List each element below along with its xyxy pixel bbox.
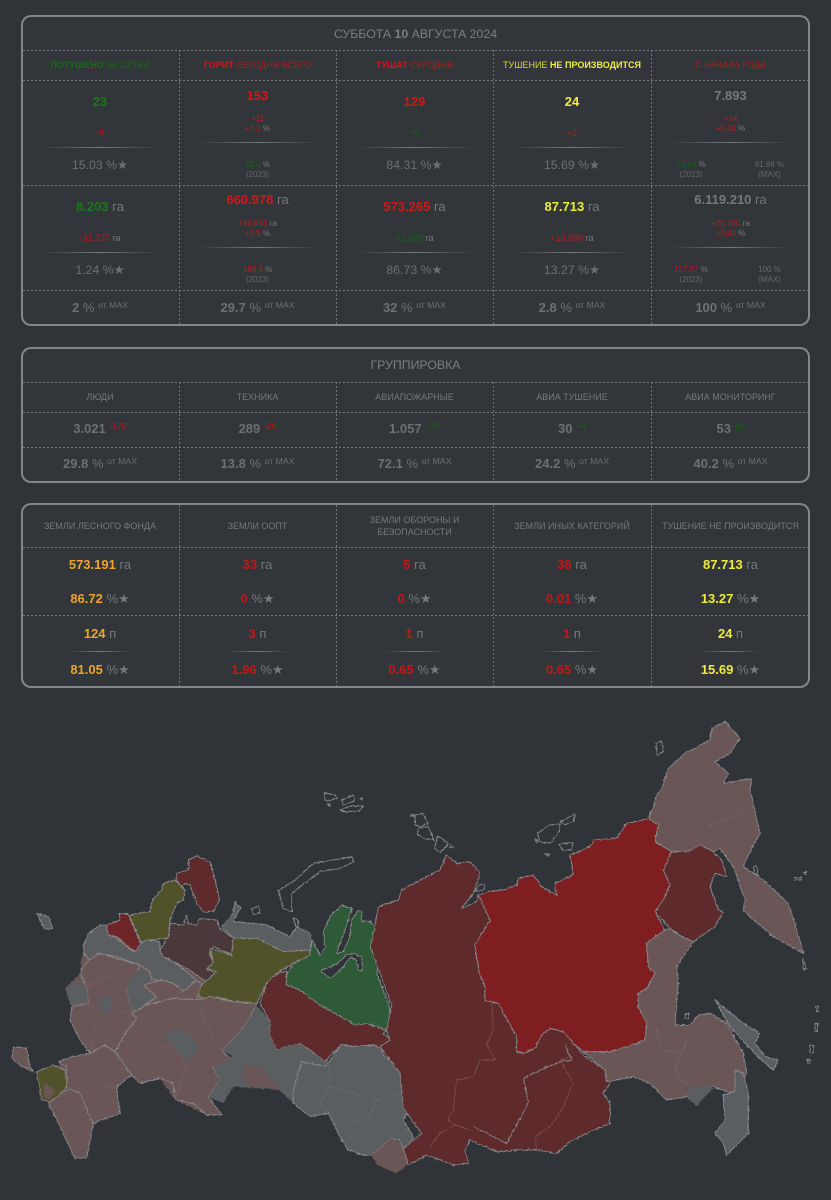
column: protected lands <box>228 521 288 677</box>
column: other lands: 36 га <box>557 557 587 572</box>
cell: year count: (2023) <box>679 170 703 179</box>
cell: extinguished area <box>48 199 153 277</box>
cell: not extinguished area <box>520 199 625 277</box>
island: Novaya Zemlya <box>278 857 354 912</box>
cell: burning area: 660.978 га <box>226 192 289 207</box>
column: forest lands: ЗЕМЛИ ЛЕСНОГО ФОНДА <box>44 521 156 531</box>
cell: not extinguished area: 87.713 га <box>544 199 600 214</box>
column: equipment <box>221 392 294 471</box>
column: not extinguished: 15.69 %★ <box>701 662 760 677</box>
cell: year count: +0,43 % <box>716 124 745 133</box>
region: Leningrad <box>107 913 141 952</box>
cell: being extinguished count <box>362 94 468 172</box>
region: Arkhangelsk <box>160 915 233 983</box>
column: forest lands: 81.05 %★ <box>70 662 130 677</box>
column: forest lands <box>44 521 156 677</box>
region: Kaliningrad <box>37 913 53 930</box>
region: Adygea <box>43 1083 55 1100</box>
column: people: 3.021 -170 <box>73 421 127 436</box>
column: not extinguished: 13.27 %★ <box>701 591 760 606</box>
cell: year area: +0,41 % <box>716 229 745 238</box>
region: Kostroma area <box>138 980 202 1010</box>
cell: being extinguished count: +9 <box>409 128 420 138</box>
column: protected lands: 3 п <box>249 626 266 641</box>
column: other lands: 0.01 %★ <box>546 591 598 606</box>
column: not extinguished <box>662 521 799 677</box>
column: defense lands: ЗЕМЛИ ОБОРОНЫ И <box>370 515 459 525</box>
column: aerial monitoring <box>685 392 776 471</box>
cell: being extinguished count: 84.31 %★ <box>386 158 443 172</box>
column: forest lands: 86.72 %★ <box>70 591 130 606</box>
column: protected lands: 1.96 %★ <box>231 662 284 677</box>
column: aerial firefighting: 30 +4 <box>558 421 586 436</box>
islands: Kuril and Commander <box>474 866 818 1063</box>
column: forest lands: 124 п <box>84 626 116 641</box>
cell: burning count: +11 <box>251 114 264 123</box>
region: Sverdlovsk and Tyumen <box>260 972 390 1062</box>
region: gray Siberia <box>293 1044 413 1155</box>
cell: extinguished count: 15.03 %★ <box>72 158 128 172</box>
cell: year area: +25.100 га <box>711 219 750 228</box>
cell: not extinguished count: 24 <box>565 94 579 109</box>
region: Yamal and Khanty-Mansi <box>287 905 391 1030</box>
region: gray Bashkiria <box>222 1005 277 1067</box>
column: other lands: 1 п <box>563 626 581 641</box>
islands: Franz Josef Land <box>323 793 363 812</box>
cell: year count: (MAX) <box>758 170 781 179</box>
inner borders, west <box>87 970 403 1123</box>
column: other lands: 0.65 %★ <box>546 662 598 677</box>
heading: forces: ГРУППИРОВКА <box>370 358 460 372</box>
cell: not extinguished count <box>519 94 625 172</box>
cell: extinguished count: 23 <box>93 94 107 109</box>
cell: not extinguished area: +13.990 га <box>550 233 594 243</box>
underlay: Urals and West Siberia <box>208 1005 408 1155</box>
cell: being extinguished area: 86.73 %★ <box>386 263 443 277</box>
region: gray Jewish oblast <box>688 1085 713 1105</box>
cell: burning area: (2023) <box>246 275 269 284</box>
cell: being extinguished area <box>362 199 468 277</box>
cell: burning area <box>206 192 311 284</box>
column: defense lands: 0 %★ <box>397 591 432 606</box>
cell: percent of max, being extinguished: 32 % от MAX <box>383 300 446 315</box>
column header: extinguished: ПОТУШЕНО ЗА СУТКИ <box>51 60 149 70</box>
column header: since start of year: С НАЧАЛА ГОДА <box>695 60 766 70</box>
column: defense lands: БЕЗОПАСНОСТИ <box>377 527 452 537</box>
islands: New Siberian <box>535 814 575 856</box>
column: forest lands: 573.191 га <box>69 557 131 572</box>
cell: year count: 73.64 % <box>676 160 706 169</box>
column: aerial firefighting <box>535 392 609 471</box>
column: aerial firefighting: АВИА ТУШЕНИЕ <box>536 392 608 402</box>
cell: extinguished count <box>47 94 153 172</box>
island: Wrangel <box>656 741 663 755</box>
cell: burning count <box>206 88 311 179</box>
cell: year area: 100 % <box>758 265 781 274</box>
region: gray Volga enclave <box>163 1028 200 1062</box>
column: aerial fire crews: 1.057 +28 <box>389 421 440 436</box>
column: equipment: 13.8 % от MAX <box>221 456 294 471</box>
region: Krasnodar <box>37 1065 67 1103</box>
cell: burning area: 169.9 % <box>243 265 272 274</box>
cell: percent of max, year: 100 % от MAX <box>695 300 766 315</box>
column: aerial fire crews: 72.1 % от MAX <box>378 456 451 471</box>
region: Nenets and north coast <box>222 902 313 952</box>
island: Vaigach <box>293 918 298 927</box>
region: Khabarovsk and Amur <box>583 928 747 1105</box>
column: aerial monitoring: 53 +2 <box>716 421 744 436</box>
cell: year area: 6.119.210 га <box>694 192 767 207</box>
underlay: western Russia <box>58 925 257 1123</box>
panel: land categories <box>21 503 810 688</box>
column: protected lands: 33 га <box>243 557 272 572</box>
cell: extinguished area: -31.737 га <box>79 233 121 243</box>
column: aerial fire crews <box>375 392 454 471</box>
region: Karelia <box>129 880 185 943</box>
cell: not extinguished count: +2 <box>567 128 577 138</box>
cell: burning area: +2,5 % <box>245 229 270 238</box>
cell: year count <box>676 88 784 179</box>
column: aerial monitoring: 40.2 % от MAX <box>694 456 767 471</box>
column: other lands: ЗЕМЛИ ИНЫХ КАТЕГОРИЙ <box>514 521 630 531</box>
region: Komi <box>197 938 310 1003</box>
cell: being extinguished area: +2.826 га <box>395 233 434 243</box>
region: gray Yaroslavl area <box>127 968 158 1012</box>
region: Primorye <box>715 1070 748 1155</box>
column: protected lands: 0 %★ <box>240 591 275 606</box>
region: North Caucasus <box>48 1088 93 1158</box>
cell: burning count: 153 <box>247 88 268 103</box>
column: aerial monitoring: АВИА МОНИТОРИНГ <box>685 392 776 402</box>
cell: burning count: 43.6 % <box>245 160 270 169</box>
column: aerial fire crews: АВИАПОЖАРНЫЕ <box>375 392 454 402</box>
column header: being extinguished: ТУШАТ СЕГОДНЯ <box>376 60 453 70</box>
region: Chelyabinsk <box>242 1063 280 1090</box>
column: defense lands: 5 га <box>403 557 426 572</box>
cell: extinguished count: -9 <box>96 128 104 138</box>
bay: Gulf of Ob <box>321 953 363 978</box>
cell: year count: 7.893 <box>714 88 747 103</box>
cell: percent of max, not extinguished: 2.8 % от MAX <box>539 300 605 315</box>
cell: year area: (2023) <box>679 275 703 284</box>
cell: year area <box>674 192 783 284</box>
cell: being extinguished count: 129 <box>404 94 425 109</box>
region border: Buryatia <box>473 1045 572 1143</box>
column: protected lands: ЗЕМЛИ ООПТ <box>228 521 287 531</box>
cell: year area: (MAX) <box>758 275 781 284</box>
column: equipment: ТЕХНИКА <box>237 392 278 402</box>
region: Murmansk <box>177 856 219 912</box>
column header: not extinguished: ТУШЕНИЕ НЕ ПРОИЗВОДИТСЯ <box>503 60 641 70</box>
panel: forces <box>21 347 810 483</box>
column: people <box>63 392 137 471</box>
column: not extinguished: 87.713 га <box>703 557 758 572</box>
cell: percent of max, burning: 29.7 % от MAX <box>221 300 294 315</box>
cell: burning area: +16.816 га <box>238 219 277 228</box>
inner borders, far east <box>657 810 743 1087</box>
cell: percent of max, extinguished: 2 % от MAX <box>72 300 128 315</box>
island: Kolguev <box>252 907 260 914</box>
region borders: Siberia <box>430 1003 573 1150</box>
column: people: 29.8 % от MAX <box>63 456 137 471</box>
region: gray Orenburg <box>208 1058 247 1103</box>
region: Yakutia <box>475 818 672 1053</box>
region: Crimea <box>12 1047 33 1072</box>
cell: burning count: (2023) <box>246 170 269 179</box>
region: Moscow area <box>97 997 112 1015</box>
region: Krasnoyarsk and Irkutsk <box>370 855 610 1165</box>
region: South <box>58 1045 132 1123</box>
column: people: ЛЮДИ <box>86 392 114 402</box>
column: not extinguished: 24 п <box>718 626 743 641</box>
cell: extinguished area: 8.203 га <box>76 199 124 214</box>
column: equipment: 289 -20 <box>239 421 276 436</box>
island: Sakhalin <box>715 1000 778 1070</box>
region: Magadan <box>655 845 727 942</box>
region: gray west border <box>65 982 88 1005</box>
region: Chukotka and Kamchatka <box>648 722 803 953</box>
panel: daily summary <box>21 15 810 326</box>
region: Central Russia <box>70 953 140 1053</box>
cell: year area: 157.87 % <box>674 265 708 274</box>
column: defense lands: 0.65 %★ <box>388 662 441 677</box>
heading: date: СУББОТА 10 АВГУСТА 2024 <box>334 27 497 41</box>
column: other lands <box>514 520 630 677</box>
islands: Severnaya Zemlya <box>411 813 454 853</box>
region: Volga <box>115 997 257 1115</box>
cell: year count: 61.88 % <box>755 160 784 169</box>
column: defense lands <box>370 515 459 677</box>
cell: not extinguished count: 15.69 %★ <box>544 158 600 172</box>
cell: burning count: +7,2 % <box>245 124 270 133</box>
region: gray Kurgan <box>263 1043 325 1090</box>
cell: extinguished area: 1.24 %★ <box>75 263 125 277</box>
region: Northwest gray <box>83 925 197 992</box>
region: Altai <box>372 1138 408 1173</box>
cell: year count: +34 <box>724 114 737 123</box>
column header: burning: ГОРИТ СЕГОДНЯ ВСЕГО <box>204 60 311 70</box>
column: aerial firefighting: 24.2 % от MAX <box>535 456 609 471</box>
cell: not extinguished area: 13.27 %★ <box>544 263 600 277</box>
column: not extinguished: ТУШЕНИЕ НЕ ПРОИЗВОДИТСЯ <box>662 521 799 531</box>
column: defense lands: 1 п <box>406 626 423 641</box>
cell: being extinguished area: 573.265 га <box>383 199 446 214</box>
